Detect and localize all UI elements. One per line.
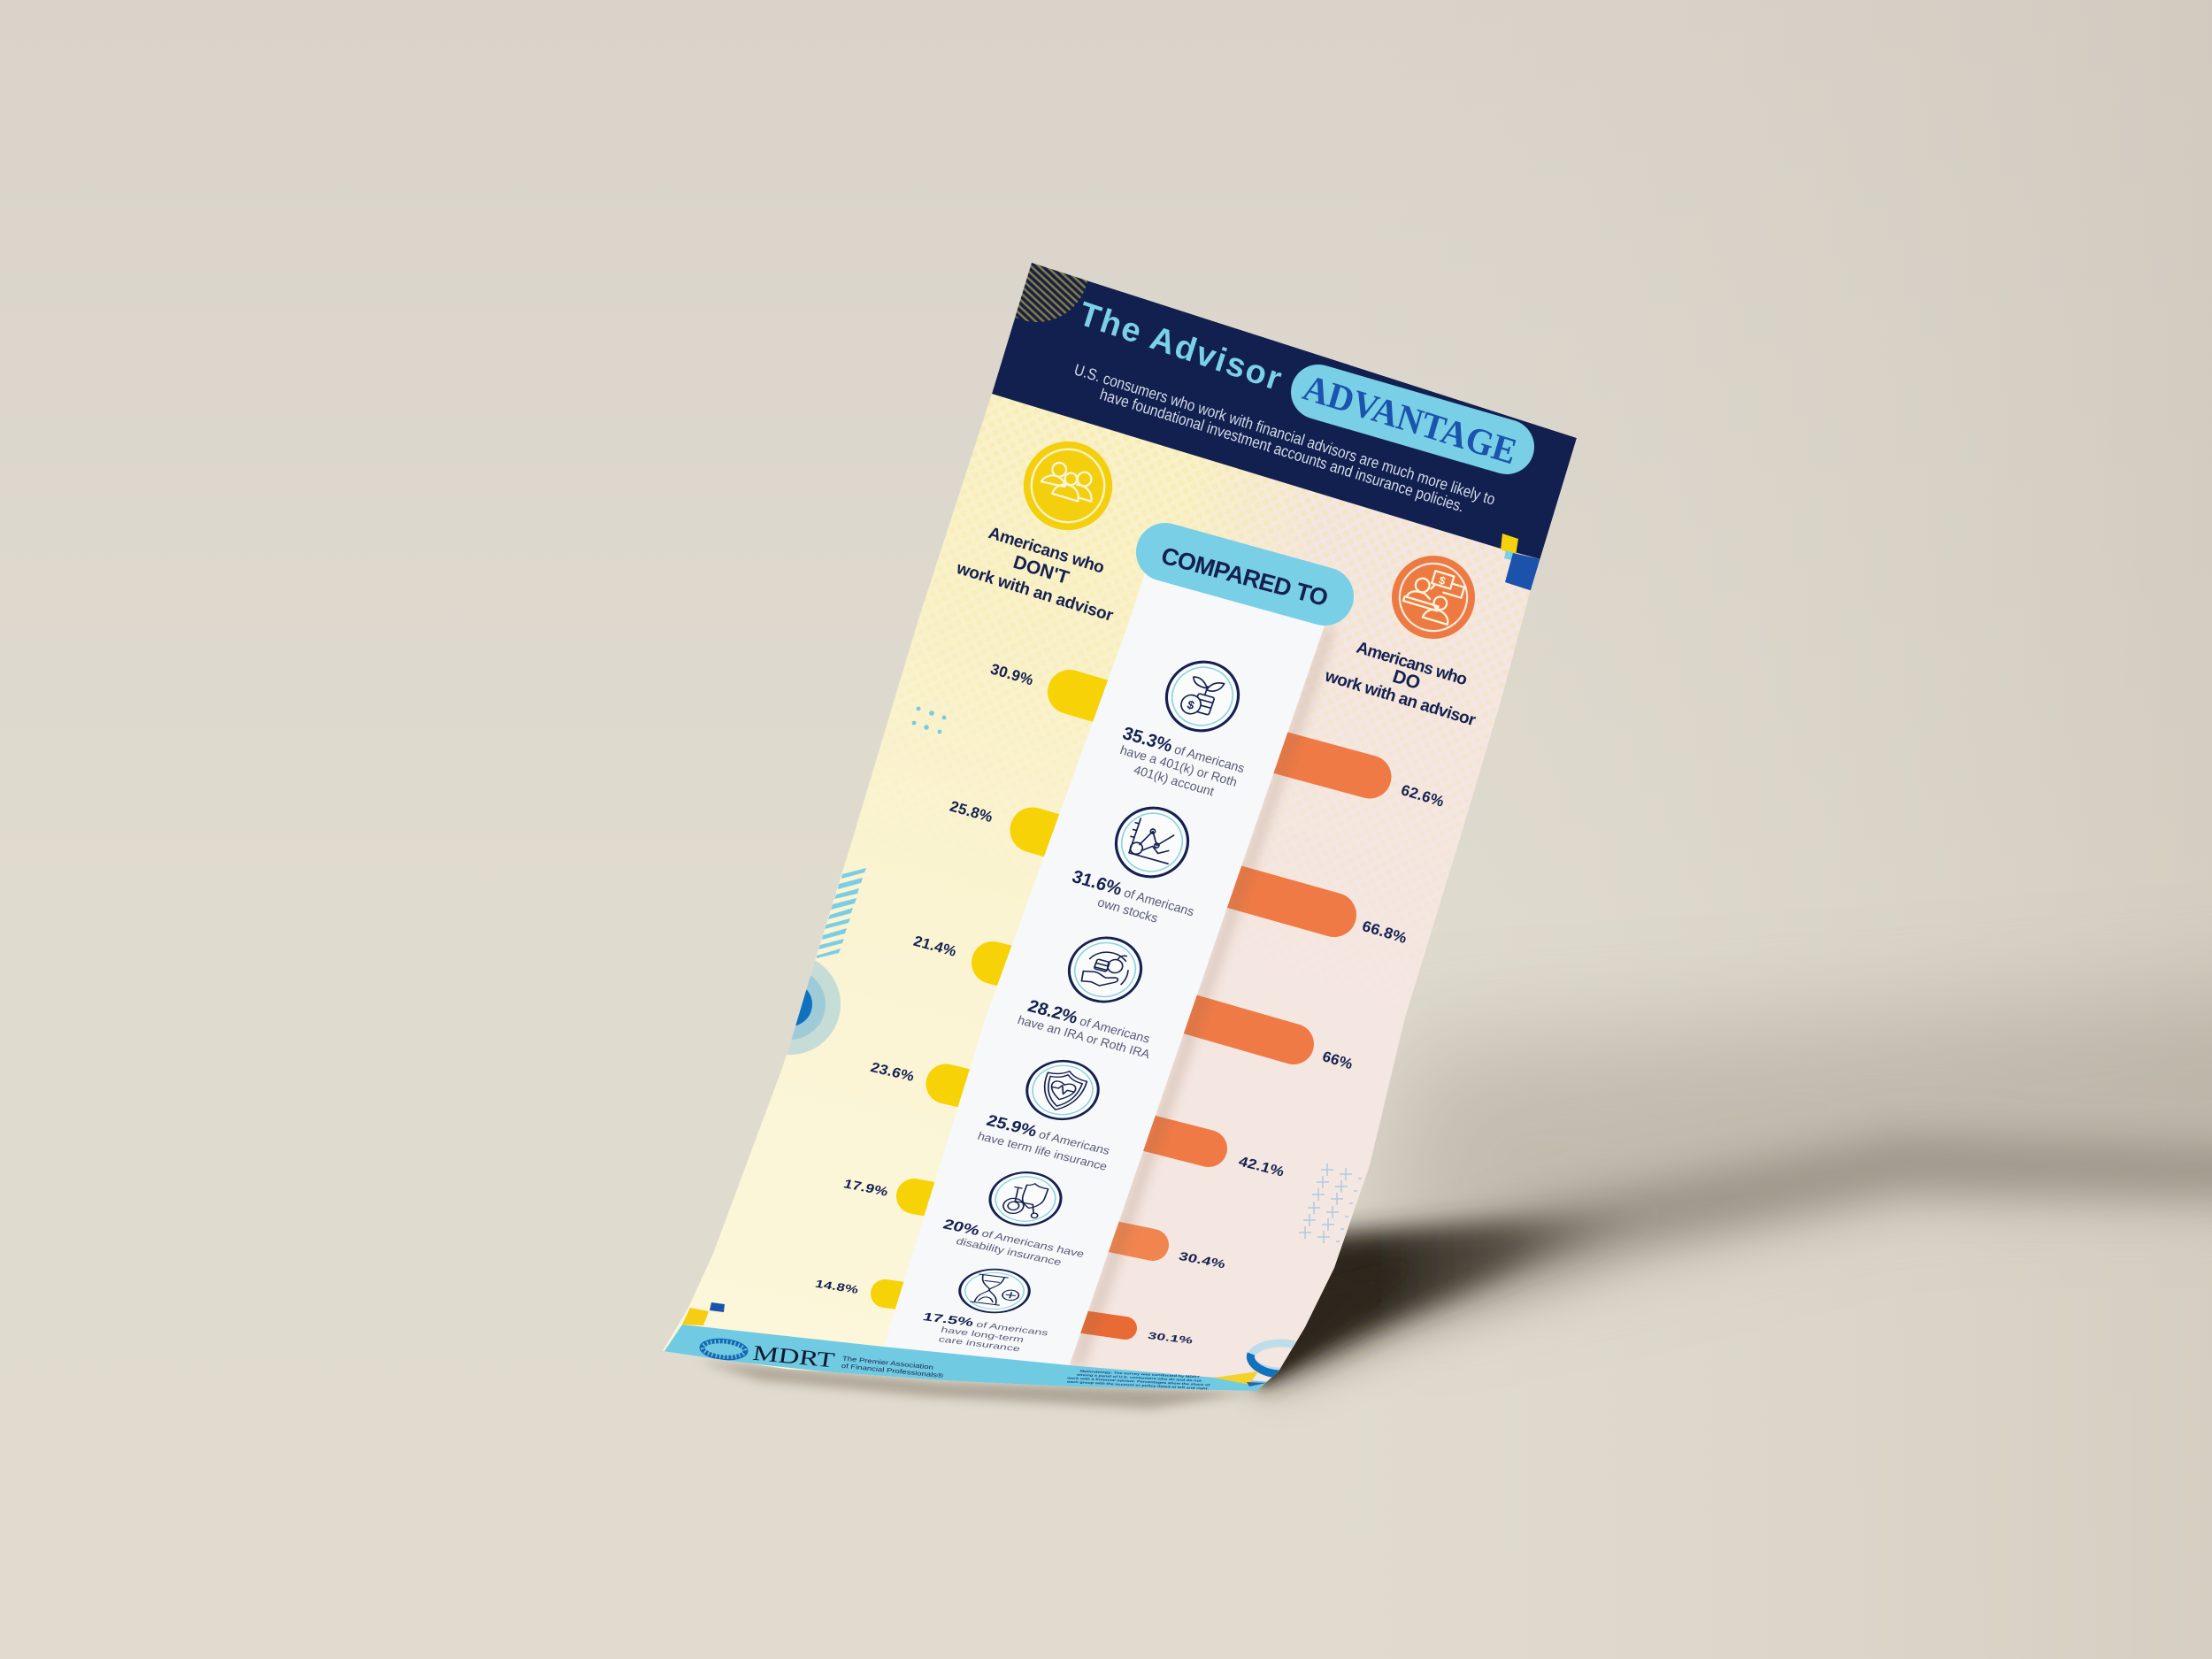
text: 20% disability: 20% of Americans have <box>941 1216 1087 1260</box>
value 30.1%: 30.1% <box>1147 1331 1194 1347</box>
heading: Americans who don't work with an advisor: Americans who <box>986 524 1107 578</box>
icon: orange advisor circle: $ <box>1438 574 1447 588</box>
value 14.8%: 14.8% <box>814 1279 860 1296</box>
row 6: long-term care <box>916 1265 1050 1356</box>
logo: MDRT wreath <box>699 1337 749 1362</box>
column shadow <box>1069 626 1336 1367</box>
panel: navy header band <box>992 263 1577 559</box>
text: 25.9% term life: have term life insurance <box>976 1130 1109 1173</box>
text: 17.5% long-term care: care insurance <box>937 1334 1022 1354</box>
heading: Americans who don't work with an advisor: DON'T <box>1010 552 1071 588</box>
row 5: disability insurance <box>936 1167 1087 1271</box>
pill: COMPARED TO: COMPARED TO <box>1158 542 1331 611</box>
heading: Americans who do work with an advisor: DO <box>1390 666 1423 694</box>
bar: 66.8% orange <box>1221 883 1334 915</box>
bars: yellow, non-advisor group <box>885 692 1141 1301</box>
row 1: 401(k) <box>1110 654 1248 805</box>
panel: poster paper background <box>663 280 1577 1391</box>
decoration: cyan stripes <box>817 868 866 958</box>
decoration: plus-sign grid <box>1299 1164 1362 1243</box>
value 30.9%: 30.9% <box>988 660 1036 689</box>
title: The Advisor: The Advisor <box>1074 296 1286 398</box>
text: 17.5% long-term care: have long-term <box>940 1325 1025 1344</box>
value 42.1%: 42.1% <box>1237 1154 1286 1179</box>
footer fine print: among a panel of U.S. consumers who do and do not <box>1077 1373 1202 1382</box>
icon: yellow people circle <box>1013 431 1123 541</box>
footer tagline <box>841 1355 946 1379</box>
decoration: ring at bottom right <box>1250 1343 1311 1374</box>
bar: 30.9% yellow <box>1070 692 1141 713</box>
value 66%: 66% <box>1320 1048 1356 1072</box>
heading: Americans who do work with an advisor: work with an advisor <box>1322 666 1479 730</box>
decoration: cyan dots <box>912 707 946 733</box>
text: 25.9% term life: 25.9% of Americans <box>984 1112 1113 1159</box>
icon: orange advisor circle <box>1382 545 1485 649</box>
footer fine print <box>1065 1369 1212 1390</box>
subtitle: U.S. consumers who work with financial advisors are much more likely to <box>1072 360 1497 509</box>
bar: 23.6% yellow <box>946 1084 1018 1101</box>
cast shadow of the poster <box>699 973 2212 1409</box>
footer tagline: of Financial Professionals® <box>841 1362 944 1379</box>
icon: wheelchair and shield <box>982 1167 1069 1231</box>
footer fine print: Methodology: The survey was conducted by MDRT <box>1079 1370 1200 1379</box>
bar: 30.4% orange <box>1097 1233 1153 1245</box>
text: 17.5% long-term care <box>916 1310 1050 1356</box>
text: 31.6% own stocks: own stocks <box>1095 895 1160 926</box>
text: 17.5% long-term care: 17.5% of Americans <box>921 1310 1050 1338</box>
footer tagline: The Premier Association <box>841 1355 934 1371</box>
decoration: striped corner circle <box>1015 263 1087 322</box>
icon: hand with coins <box>1060 930 1150 1010</box>
text: 28.2% have an IRA: have an IRA or Roth IRA <box>1016 1012 1153 1061</box>
row 2: stocks <box>1064 800 1197 935</box>
bar: 25.8% yellow <box>1033 830 1106 851</box>
icon: plant and coin: $ <box>1186 698 1196 712</box>
title pill: ADVANTAGE: ADVANTAGE <box>1299 367 1521 472</box>
icon: plant and coin <box>1157 654 1248 739</box>
value 25.8%: 25.8% <box>948 798 995 826</box>
heading: Americans who do work with an advisor <box>1322 639 1479 730</box>
icon: shield with heart <box>1018 1055 1107 1125</box>
value 17.9%: 17.9% <box>841 1178 890 1199</box>
decoration: yellow and blue squares at header right <box>1501 534 1540 591</box>
heading: Americans who don't work with an advisor <box>954 524 1116 626</box>
panel: white centre column <box>883 572 1325 1367</box>
row 3: IRA <box>1016 930 1159 1061</box>
bar: 14.8% yellow <box>885 1294 938 1301</box>
text: 35.3% have a 401(k): 35.3% of Americans <box>1120 724 1248 777</box>
footer fine print: work with a financial advisor. Percentages show the share of <box>1066 1376 1210 1386</box>
value 30.4%: 30.4% <box>1177 1250 1227 1271</box>
bar: 21.4% yellow <box>993 963 1062 980</box>
heading: Americans who don't work with an advisor: work with an advisor <box>954 559 1116 626</box>
text: 35.3% have a 401(k) <box>1110 724 1248 805</box>
bar: 62.6% orange <box>1265 749 1370 777</box>
heading: Americans who do work with an advisor: Americans who <box>1354 639 1470 689</box>
value 62.6%: 62.6% <box>1399 781 1447 810</box>
value 23.6%: 23.6% <box>869 1060 917 1085</box>
subtitle: have foundational investment accounts and insurance policies. <box>1098 385 1466 516</box>
text: 25.9% term life <box>976 1111 1116 1173</box>
bar: 17.9% yellow <box>914 1196 982 1209</box>
decoration: concentric circles on left edge <box>787 961 841 1055</box>
text: 31.6% own stocks: 31.6% of Americans <box>1070 867 1197 920</box>
values: left percentages <box>814 660 1036 1296</box>
icon: hourglass and plus <box>954 1265 1035 1317</box>
text: 35.3% have a 401(k): 401(k) account <box>1132 764 1216 799</box>
values: right percentages <box>1147 781 1447 1347</box>
bar: 30.1% orange <box>1071 1320 1125 1328</box>
value 66.8%: 66.8% <box>1360 917 1409 947</box>
logo: MDRT wordmark: MDRT <box>751 1341 836 1372</box>
text: 20% disability: disability insurance <box>955 1235 1064 1268</box>
footer fine print: each group with the account or policy listed at left and right. <box>1067 1380 1209 1390</box>
bar: 42.1% orange <box>1133 1129 1209 1148</box>
text: 28.2% have an IRA: 28.2% of Americans <box>1025 996 1153 1048</box>
bars: orange, advisor group <box>1071 749 1370 1328</box>
text: 35.3% have a 401(k): have a 401(k) or Roth <box>1118 743 1239 790</box>
panel: footer band <box>663 1302 1274 1394</box>
icon: stock chart <box>1107 800 1197 885</box>
poster <box>663 263 1577 1391</box>
bar: 66% orange <box>1177 1010 1294 1044</box>
row 4: term life insurance <box>976 1055 1116 1173</box>
value 21.4%: 21.4% <box>911 933 959 960</box>
